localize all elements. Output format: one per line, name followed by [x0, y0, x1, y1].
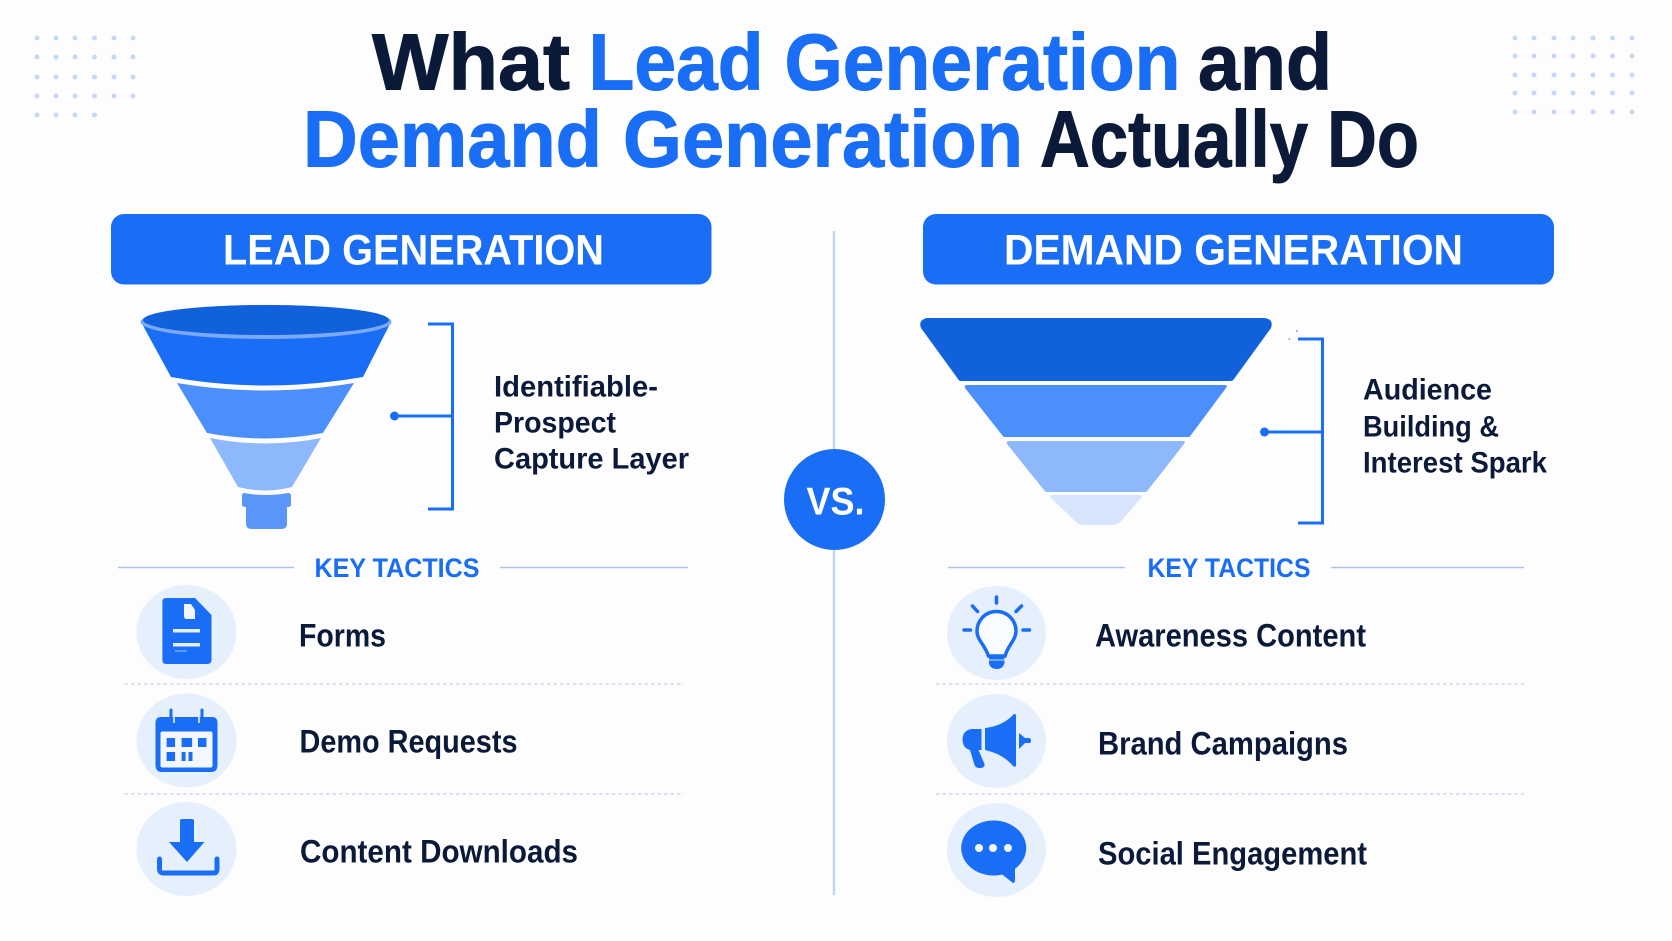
vs badge: VS.	[806, 480, 864, 523]
tactic: demo requests: Demo Requests	[300, 724, 518, 760]
title	[303, 18, 1419, 184]
header: demand generation	[923, 214, 1554, 284]
header: demand generation: DEMAND GENERATION	[1004, 226, 1463, 274]
funnel: demand generation	[920, 318, 1272, 525]
funnel: lead generation	[140, 305, 392, 529]
title: Lead Generation	[588, 18, 1180, 106]
label: identifiable-prospect capture layer: Prospect	[494, 406, 616, 440]
bracket: demand generation	[1260, 330, 1322, 523]
tactic: social engagement	[947, 803, 1367, 897]
key tactics heading: lead generation: KEY TACTICS	[314, 553, 480, 583]
label: audience building and interest spark: Building &	[1363, 410, 1499, 444]
decorative dot grid: top right	[1512, 36, 1634, 114]
label: identifiable-prospect capture layer: Identifiable-	[494, 370, 658, 404]
label: audience building and interest spark	[1363, 374, 1547, 480]
title: and	[1198, 18, 1332, 106]
label: audience building and interest spark: Interest Spark	[1363, 446, 1547, 480]
tactic: demo requests	[136, 694, 518, 788]
tactic: content downloads: Content Downloads	[300, 834, 578, 870]
tactic: forms: Forms	[299, 618, 386, 654]
title: Actually Do	[1040, 94, 1419, 184]
tactic: brand campaigns	[947, 694, 1348, 788]
title: What	[372, 18, 570, 106]
icon: calendar	[156, 710, 218, 772]
tactic: forms	[136, 585, 386, 679]
icon: megaphone	[962, 714, 1031, 768]
key tactics heading: demand generation: KEY TACTICS	[1148, 553, 1310, 583]
tactic: awareness content	[947, 586, 1366, 680]
icon: chat bubble	[961, 820, 1026, 883]
tactic: social engagement: Social Engagement	[1098, 836, 1367, 872]
panel: demand generation	[920, 214, 1554, 897]
label: audience building and interest spark: Audience	[1363, 374, 1492, 406]
header: lead generation: LEAD GENERATION	[223, 226, 604, 274]
icon: document	[162, 598, 212, 664]
panel: lead generation	[111, 214, 712, 896]
bracket: lead generation	[390, 324, 452, 509]
label: identifiable-prospect capture layer: Capture Layer	[494, 442, 689, 476]
tactic: brand campaigns: Brand Campaigns	[1098, 726, 1348, 762]
tactic: awareness content: Awareness Content	[1095, 618, 1366, 654]
header: lead generation	[111, 214, 712, 284]
icon: download	[160, 819, 217, 873]
tactic: content downloads	[136, 802, 578, 896]
center divider	[833, 231, 835, 895]
label: identifiable-prospect capture layer	[494, 370, 689, 476]
icon: light bulb	[964, 597, 1030, 669]
title: Demand Generation	[303, 94, 1023, 184]
vs badge	[784, 449, 885, 550]
decorative dot grid: top left	[34, 36, 136, 118]
